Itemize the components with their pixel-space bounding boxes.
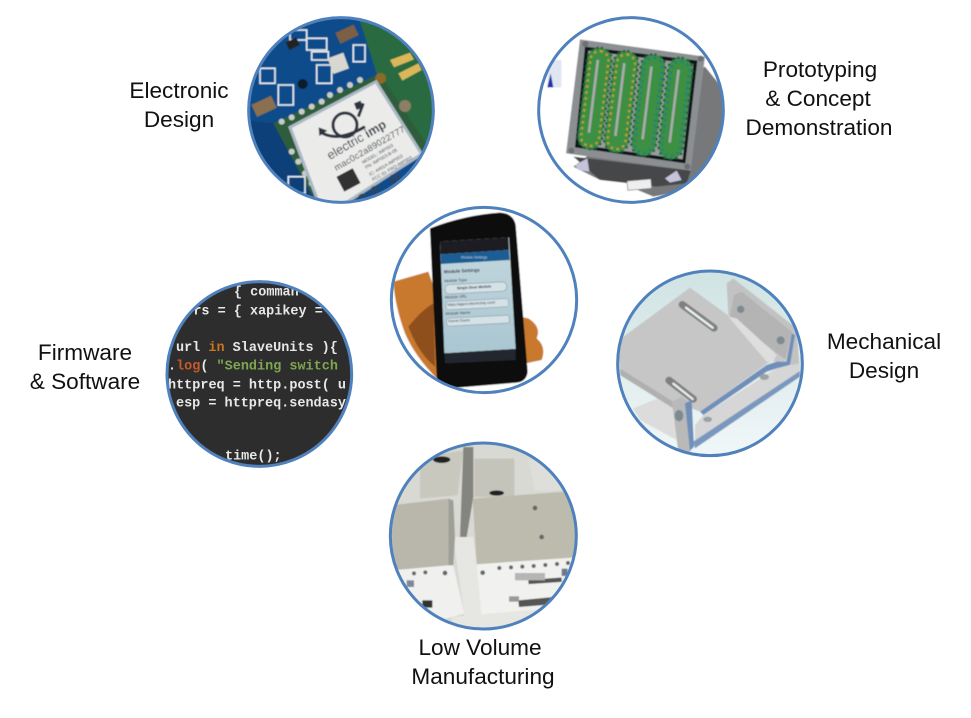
- photo: circuit board with electric imp module: PN: IMP003-B-05: [364, 147, 399, 170]
- label: prototyping and concept demonstration: & Concept: [765, 86, 871, 111]
- photo: stacked grey enclosures: [392, 444, 575, 628]
- photo: hand holding phone: Module Settings: [444, 267, 480, 274]
- photo: source code on dark editor: rs = { xapikey =: [193, 304, 323, 319]
- panel: firmware and software: [166, 280, 354, 468]
- label: mechanical design: Design: [849, 358, 919, 383]
- label: low volume manufacturing: Manufacturing: [411, 664, 555, 689]
- panel: smartphone app: [390, 206, 578, 394]
- label: electronic design: Design: [144, 107, 214, 132]
- ring: [390, 443, 576, 629]
- photo: circuit board with electric imp module: MODEL: IMP003: [361, 143, 394, 165]
- photo: hand holding phone: Ferner Doors: [448, 318, 470, 323]
- photo: source code on dark editor: url in SlaveUnits ){: [176, 341, 338, 356]
- label: prototyping and concept demonstration: Demonstration: [746, 115, 892, 140]
- photo: hand holding phone: Module URL: [445, 293, 468, 300]
- photo: circuit board with electric imp module: [250, 19, 432, 201]
- photo: source code on dark editor: .log( "Sending switch: [168, 360, 338, 375]
- label: prototyping and concept demonstration: Prototyping: [763, 57, 877, 82]
- label: firmware and software: Firmware: [38, 340, 132, 365]
- photo: source code on dark editor: { comman: [234, 286, 299, 301]
- photo: circuit board with electric imp module: electric imp: [324, 117, 389, 163]
- ring: [618, 271, 802, 456]
- panel: mechanical design: [616, 270, 804, 458]
- label: mechanical design: Mechanical: [827, 329, 941, 354]
- photo: hand holding phone: Module Type: [444, 277, 468, 283]
- photo: hand holding phone: Module Name: [445, 310, 471, 316]
- photo: source code on dark editor: [168, 283, 350, 465]
- photo: circuit board with electric imp module: FCC ID: FRQ-IMP003: [371, 155, 413, 182]
- ring: [391, 207, 577, 393]
- photo: source code on dark editor: httpreq = http.post( u: [168, 378, 346, 393]
- photo: circuit board with electric imp module: mac0c2a89022777: [332, 124, 407, 173]
- photo: hand holding phone: https://agent.electricimp.com/: [448, 300, 496, 307]
- photo: flow simulation enclosure: [546, 39, 722, 198]
- ring: [167, 282, 352, 466]
- ring: [539, 18, 723, 202]
- label: firmware and software: & Software: [30, 369, 140, 394]
- photo: hand holding phone: Module Settings: [461, 255, 487, 259]
- photo: circuit board with electric imp module: IC: 4461A-IMP003: [368, 153, 404, 177]
- ring: [249, 18, 433, 202]
- photo: sheet metal bracket CAD model: [619, 272, 801, 454]
- photo: hand holding phone: [394, 212, 544, 388]
- panel: prototyping: [537, 16, 725, 204]
- label: low volume manufacturing: Low Volume: [418, 635, 542, 660]
- photo: source code on dark editor: time();: [225, 449, 282, 464]
- photo: source code on dark editor: esp = httpreq.sendasy: [176, 397, 346, 412]
- label: electronic design: Electronic: [129, 78, 229, 103]
- panel: low volume manufacturing: [388, 442, 578, 630]
- photo: hand holding phone: Single Door Module: [457, 285, 491, 290]
- panel: electronic design: [247, 16, 435, 204]
